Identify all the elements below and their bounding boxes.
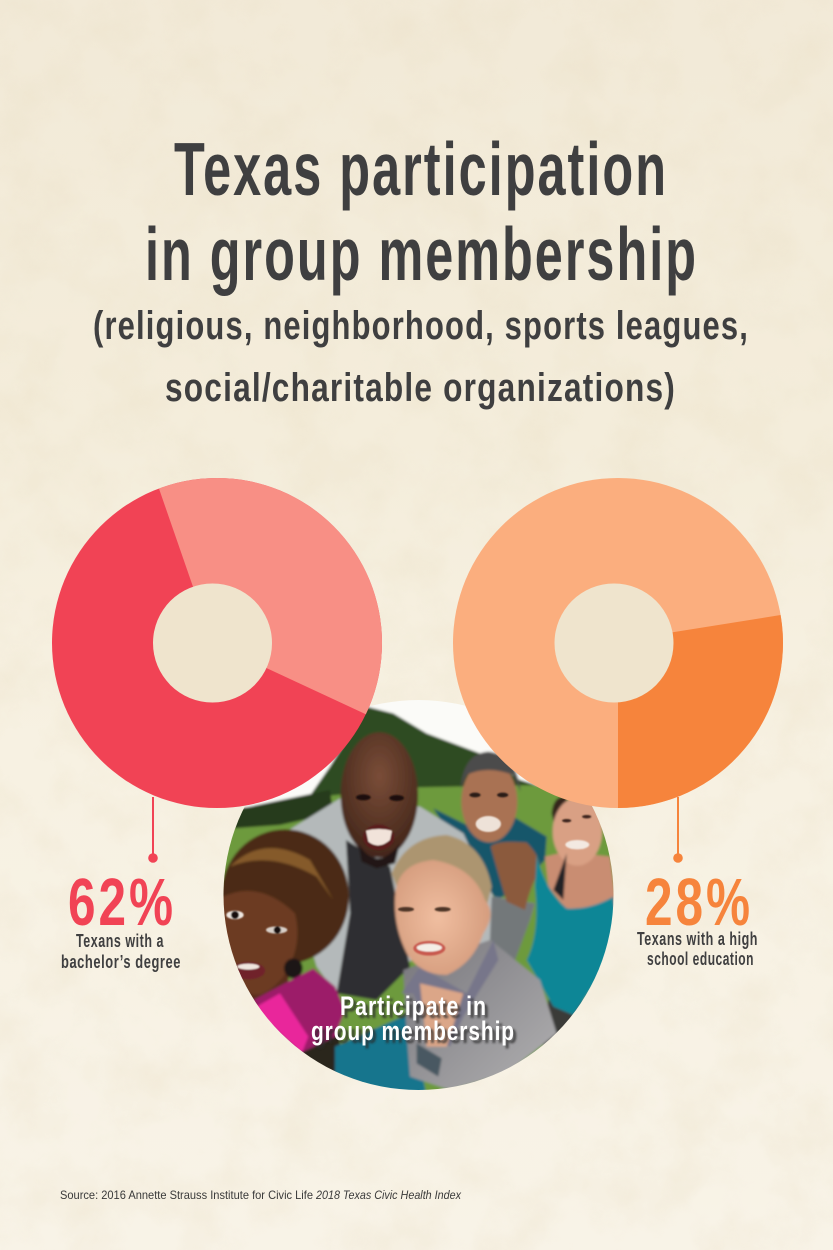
donut base: remaining 72 percent: [453, 478, 783, 808]
woman right: smile and eyes: [565, 840, 589, 849]
donut base: 62 percent segment: [52, 478, 382, 808]
man: teal shirt: [433, 808, 547, 900]
left woman: mouth: [232, 962, 265, 979]
man right: head: [461, 761, 517, 842]
donut chart: 62 percent, bachelor's degree: [52, 478, 382, 808]
man: gray jacket, center: [288, 796, 506, 992]
front woman: hair: [392, 835, 492, 907]
man: eyes: [356, 794, 371, 800]
left woman: neck: [246, 972, 290, 1006]
source note: Source: 2016 Annette Strauss Institute for Civic Life: [60, 1188, 313, 1202]
left woman: hair: [221, 829, 349, 964]
photo: group of five people smiling: [224, 700, 614, 1090]
donut chart: 28 percent, high school education: [453, 478, 783, 808]
photo caption: Participate in: [340, 991, 487, 1021]
donut segment: remaining 38 percent: [159, 478, 382, 714]
stat: 28 percent: Texans with a high: [637, 928, 758, 949]
woman right: dark shorts: [543, 1000, 583, 1047]
left woman: earring: [284, 958, 303, 978]
man right: mouth and eyes: [476, 816, 501, 832]
man: bald head: [341, 732, 418, 858]
left woman: magenta top: [253, 968, 345, 1052]
stat: 62 percent: [61, 865, 181, 972]
pin: right callout: [673, 797, 683, 863]
stat: 62 percent: 62%: [68, 865, 176, 940]
front woman: gray hoodie: [403, 940, 557, 1090]
photo caption: [311, 991, 518, 1049]
man: beard: [358, 843, 400, 868]
front woman: teal sleeve: [335, 1013, 427, 1097]
woman right: teal top: [527, 855, 620, 1015]
grass: [224, 784, 614, 1090]
front woman: mouth and eyes: [413, 941, 445, 956]
man: mouth: [363, 825, 394, 850]
dark ground, lower left: [289, 1032, 342, 1072]
man: black shirt: [337, 840, 410, 1000]
front woman: face: [395, 860, 490, 975]
donut hole: [153, 584, 272, 702]
trees: [310, 706, 536, 798]
stat: 28 percent: 28%: [645, 865, 753, 940]
donut hole: [554, 584, 674, 702]
woman right: hair, head and shoulders: [550, 797, 568, 822]
stat: 62 percent: Texans with a: [76, 930, 164, 951]
source note: 2018 Texas Civic Health Index: [315, 1188, 462, 1202]
stat: 28 percent: [637, 865, 758, 969]
donut segment: 28 percent: [618, 615, 783, 808]
photo caption: Participate in: [343, 994, 490, 1024]
stat: 62 percent: bachelor’s degree: [61, 951, 181, 972]
photo caption: group membership: [311, 1016, 515, 1046]
sky: [244, 700, 537, 810]
source note: [60, 1188, 462, 1202]
title: [145, 127, 698, 296]
left woman: eyes: [226, 911, 244, 919]
pin: left callout: [148, 797, 158, 863]
photo caption: group membership: [314, 1019, 518, 1049]
subtitle: [93, 304, 749, 410]
left woman: face: [217, 891, 297, 995]
stat: 28 percent: school education: [647, 948, 754, 969]
fist: [491, 842, 540, 910]
subtitle: social/charitable organizations): [165, 366, 676, 410]
